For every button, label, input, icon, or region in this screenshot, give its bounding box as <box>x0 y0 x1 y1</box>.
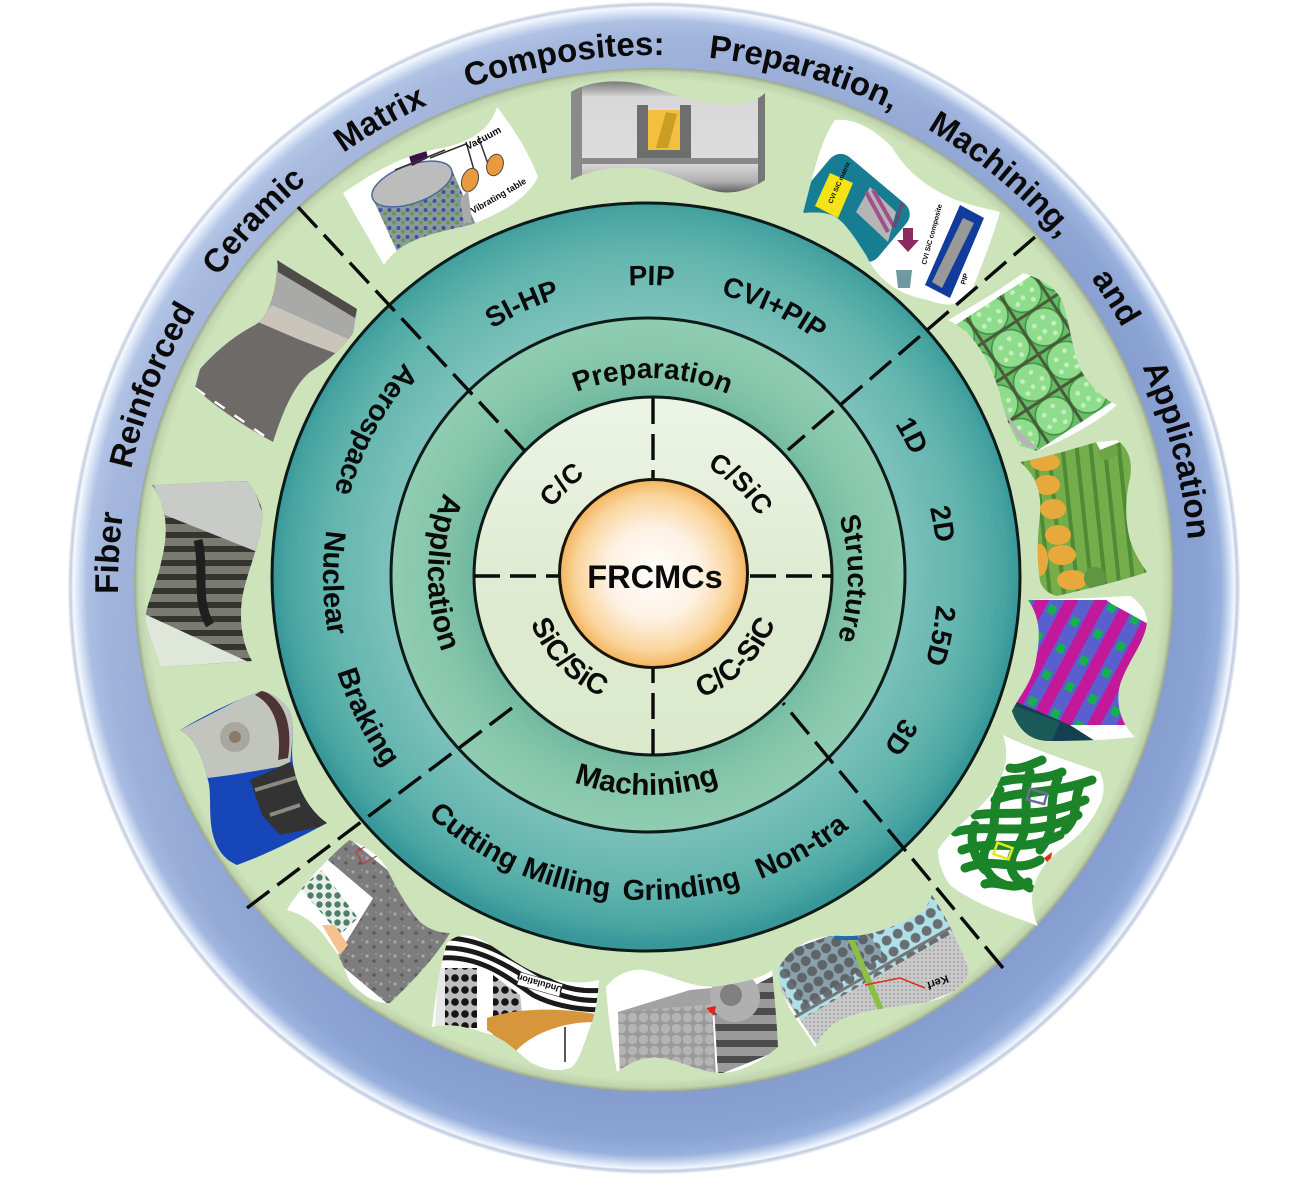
middle ring: research aspects <box>391 318 905 832</box>
image: 2.5D woven structure <box>1012 596 1147 741</box>
teal ring labels: applications and machining methods: Aerospace Nuclear Braking Cutting Milling Grinding Non-tra <box>322 363 850 903</box>
image: braking disc machine <box>175 688 330 868</box>
teal ring labels: preparation methods and structures: SI-HP PIP CVI+PIP 1D 2D 2.5D 3D <box>486 266 956 754</box>
label: undulation: Undulation <box>516 972 564 995</box>
label: vibrating table: Vibrating table <box>469 176 528 216</box>
image: machined surface micrograph <box>287 840 450 1004</box>
image: cutting kerf schematic <box>778 895 969 1047</box>
middle ring labels: application and machining: Application Machining <box>425 493 718 796</box>
image: vibrating table slurry infiltration <box>340 100 540 270</box>
inner ring labels: SiC/SiC and C/C-SiC: SiC/SiC C/C-SiC <box>532 618 773 695</box>
image: 3D woven mesh <box>938 735 1104 926</box>
green image ring <box>134 68 1174 1092</box>
label: CVI SiC matrix infiltration: CVI SiC matrix <box>827 161 852 205</box>
image: CVI reactor and PIP <box>803 120 1000 305</box>
image: undulation cross-section <box>432 936 599 1070</box>
image: nuclear component <box>140 478 265 672</box>
inner ring: composite systems <box>474 397 832 755</box>
middle ring labels: preparation and structure: Preparation Structure <box>572 362 866 642</box>
label: PIP: PIP <box>960 272 970 286</box>
image: 1D fiber bundles <box>948 273 1117 451</box>
dashed section dividers <box>247 207 1035 968</box>
curved title around outer ring: Fiber Reinforced Ceramic Matrix Composites: Preparation, Machining, and Application <box>94 34 1206 592</box>
teal ring: methods and applications <box>272 203 1020 951</box>
label: reactor: Reactor <box>891 201 906 229</box>
image: fiber block <box>606 970 778 1073</box>
image: aerospace panel <box>195 260 357 442</box>
label: vacuum: Vacuum <box>464 125 503 153</box>
label: CVI SiC composite preform: CVI SiC composite <box>921 203 944 266</box>
image: 2D woven laminate <box>1020 440 1147 596</box>
inner ring labels: C/C and C/SiC: C/C C/SiC <box>542 454 772 514</box>
label: kerf: Kerf <box>925 972 950 991</box>
image: PIP furnace <box>571 81 765 192</box>
core label: FRCMCs <box>587 559 723 595</box>
core circle <box>560 480 748 668</box>
